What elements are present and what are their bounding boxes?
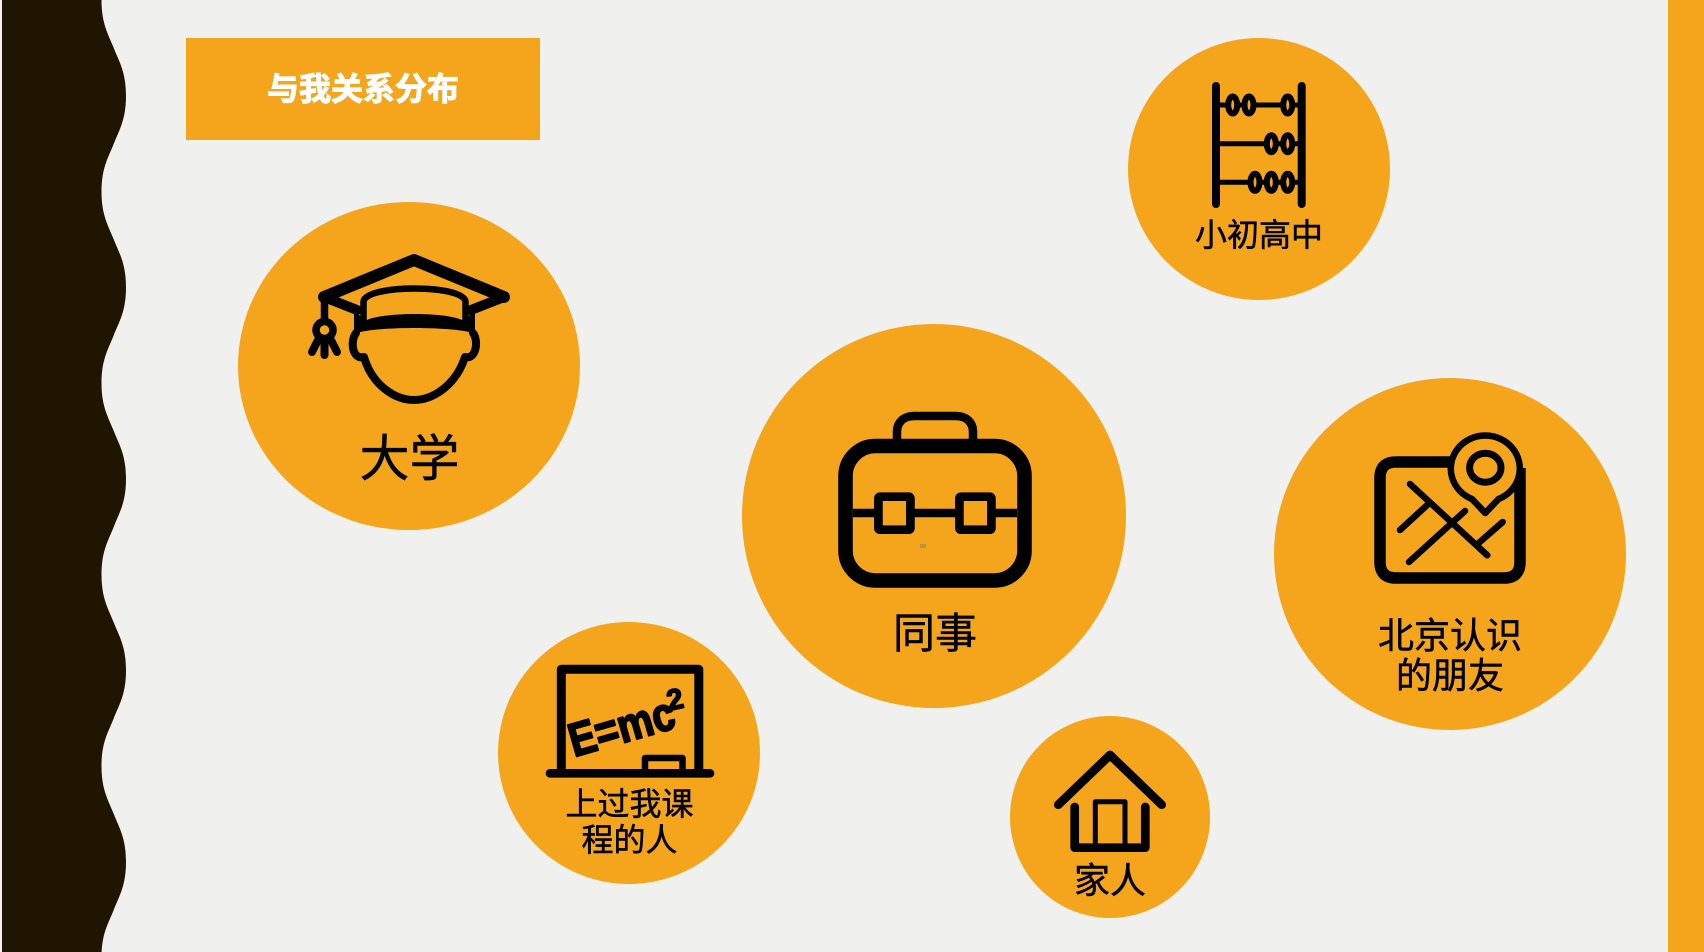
label: students xyxy=(565,786,694,858)
icon: blackboard: 2 xyxy=(664,683,686,718)
label: school: 小初高中 xyxy=(1195,217,1323,253)
label: university: 大学 xyxy=(360,431,460,487)
panel: Beijing friends xyxy=(1274,378,1626,730)
label: students: 上过我课 xyxy=(565,786,694,822)
title text: 与我关系分布 xyxy=(267,71,459,107)
label: Beijing friends: 的朋友 xyxy=(1396,655,1504,696)
label: Beijing friends xyxy=(1378,615,1522,696)
title banner xyxy=(186,38,540,140)
panel: colleagues xyxy=(742,324,1126,708)
label: family: 家人 xyxy=(1074,860,1146,901)
label: colleagues: 同事 xyxy=(893,610,977,657)
panel: university xyxy=(238,202,580,530)
panel: students xyxy=(498,622,760,884)
panel: family xyxy=(1010,716,1210,918)
label: Beijing friends: 北京认识 xyxy=(1378,615,1522,656)
panel: school xyxy=(1128,38,1390,300)
icon: briefcase xyxy=(846,416,1024,580)
icon: blackboard: E=mc xyxy=(562,686,681,767)
left dark wavy band xyxy=(2,0,126,952)
icon: graduation cap xyxy=(312,260,504,400)
icon: map with pin xyxy=(1380,436,1520,578)
icon: abacus xyxy=(1216,86,1302,204)
icon: house xyxy=(1058,755,1162,848)
tiny artifact mark xyxy=(920,544,926,548)
label: students: 程的人 xyxy=(581,822,678,858)
right orange bar xyxy=(1668,0,1704,952)
